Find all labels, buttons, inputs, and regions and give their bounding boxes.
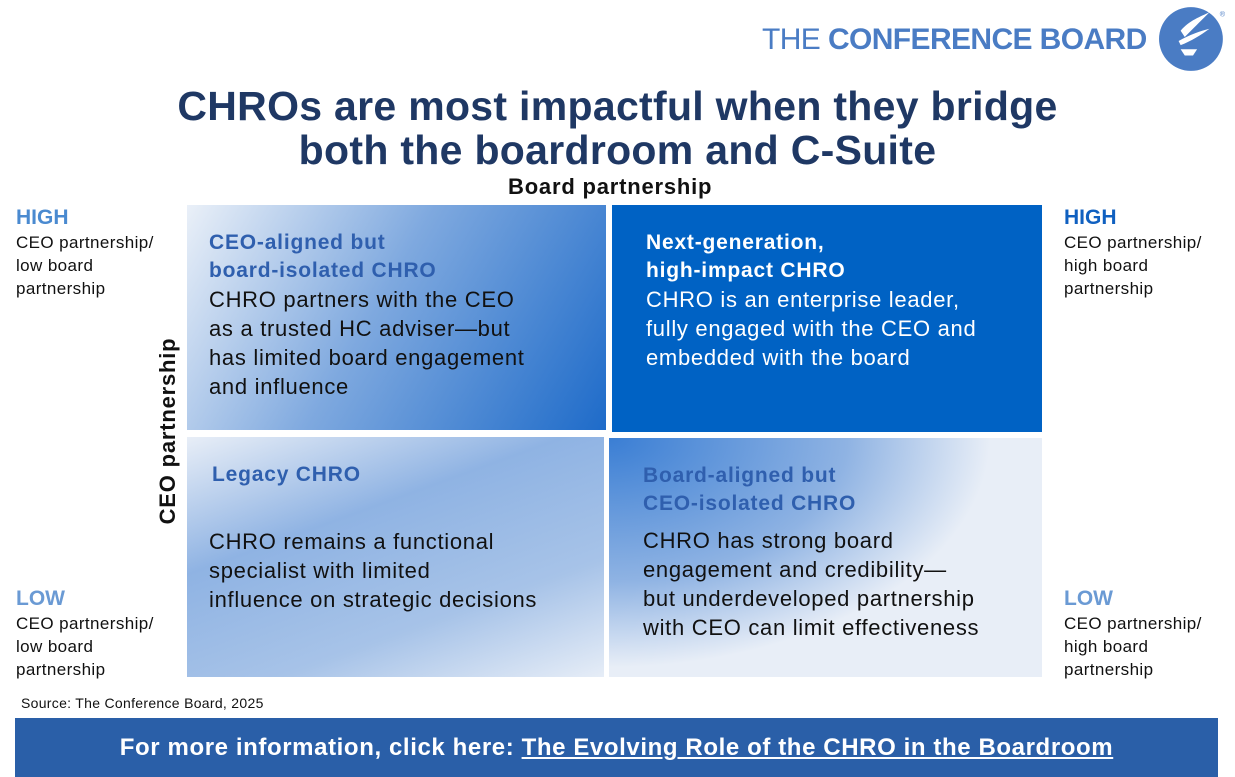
title bbox=[177, 83, 1058, 173]
side label: bottom left: low board bbox=[16, 637, 93, 656]
axis label: board partnership: Board partnership bbox=[508, 174, 712, 199]
panel: next-generation: CHRO is an enterprise leader, bbox=[646, 287, 960, 312]
side label: bottom right bbox=[1064, 587, 1202, 679]
logo: THE CONFERENCE BOARD bbox=[762, 23, 1147, 56]
source: Source: The Conference Board, 2025 bbox=[21, 695, 264, 711]
axis label: CEO partnership: CEO partnership bbox=[155, 338, 180, 524]
side label: bottom left bbox=[16, 587, 154, 679]
panel: next-generation bbox=[612, 205, 1042, 432]
panel: next-generation: high-impact CHRO bbox=[646, 259, 845, 282]
panel: CEO-aligned: CEO-aligned but bbox=[209, 231, 386, 254]
title: CHROs are most impactful when they bridge bbox=[177, 83, 1058, 129]
panel: CEO-aligned: has limited board engagement bbox=[209, 345, 525, 370]
side label: bottom left: partnership bbox=[16, 660, 105, 679]
panel: board-aligned: but underdeveloped partnership bbox=[643, 586, 975, 611]
side label: bottom right: high board bbox=[1064, 637, 1148, 656]
panel: CEO-aligned: CHRO partners with the CEO bbox=[209, 287, 515, 312]
side label: top left bbox=[16, 206, 154, 298]
side label: bottom left: CEO partnership/ bbox=[16, 614, 154, 633]
title: both the boardroom and C-Suite bbox=[299, 127, 936, 173]
panel: board-aligned: CEO-isolated CHRO bbox=[643, 492, 856, 515]
side label: top left: CEO partnership/ bbox=[16, 233, 154, 252]
side label: bottom left: LOW bbox=[16, 587, 65, 610]
panel: board-aligned: Board-aligned but bbox=[643, 464, 836, 487]
panel: next-generation: embedded with the board bbox=[646, 345, 910, 370]
side label: top left: low board bbox=[16, 256, 93, 275]
panel: CEO-aligned: as a trusted HC adviser—but bbox=[209, 316, 510, 341]
side label: bottom right: partnership bbox=[1064, 660, 1153, 679]
icon: torch: ® bbox=[1220, 9, 1226, 18]
footer banner bbox=[15, 718, 1218, 777]
panel: legacy: CHRO remains a functional bbox=[209, 529, 494, 554]
side label: top left: partnership bbox=[16, 279, 105, 298]
panel: legacy: specialist with limited bbox=[209, 558, 431, 583]
side label: top right: high board bbox=[1064, 256, 1148, 275]
side label: top right: partnership bbox=[1064, 279, 1153, 298]
panel: CEO-aligned bbox=[187, 205, 606, 430]
side label: top right: CEO partnership/ bbox=[1064, 233, 1202, 252]
panel: board-aligned: engagement and credibility— bbox=[643, 557, 947, 582]
icon: torch bbox=[1159, 7, 1226, 71]
panel: CEO-aligned: and influence bbox=[209, 374, 349, 399]
side label: top right bbox=[1064, 206, 1202, 298]
panel: legacy: Legacy CHRO bbox=[212, 463, 361, 486]
panel: legacy: influence on strategic decisions bbox=[209, 587, 537, 612]
panel: board-aligned bbox=[609, 438, 1042, 677]
panel: CEO-aligned: board-isolated CHRO bbox=[209, 259, 437, 282]
panel: board-aligned: CHRO has strong board bbox=[643, 528, 894, 553]
footer banner: For more information, click here: The Evolving Role of the CHRO in the Boardroom bbox=[120, 734, 1113, 761]
side label: top right: HIGH bbox=[1064, 206, 1116, 229]
panel: next-generation: fully engaged with the CEO and bbox=[646, 316, 976, 341]
side label: bottom right: LOW bbox=[1064, 587, 1113, 610]
panel: next-generation: Next-generation, bbox=[646, 231, 824, 254]
logo bbox=[762, 7, 1226, 71]
side label: bottom right: CEO partnership/ bbox=[1064, 614, 1202, 633]
panel: legacy bbox=[187, 437, 604, 677]
side label: top left: HIGH bbox=[16, 206, 68, 229]
panel: board-aligned: with CEO can limit effectiveness bbox=[643, 615, 979, 640]
